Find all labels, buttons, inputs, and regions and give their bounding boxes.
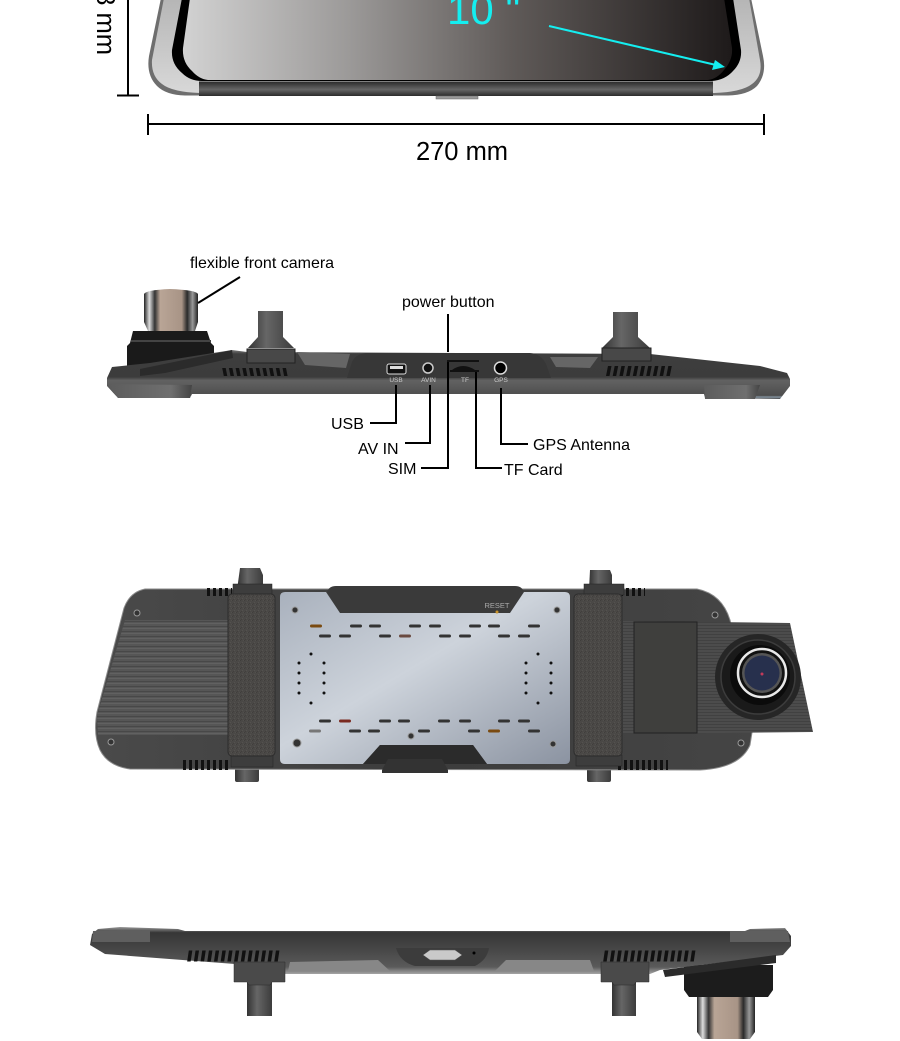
left grip texture [92, 930, 150, 942]
clip: right strap [602, 312, 650, 348]
vents right [607, 366, 673, 376]
panel: top side view with ports [107, 255, 790, 479]
rear camera assembly [684, 965, 773, 1039]
brushed left panel [97, 620, 230, 735]
height dimension line [117, 0, 139, 96]
clip: left base [247, 349, 295, 363]
callout: power button: power button [402, 294, 495, 311]
front camera assembly [127, 289, 214, 366]
diamond button [423, 950, 462, 960]
screws [108, 607, 744, 747]
port: SIM and TF slots: TF [461, 377, 469, 384]
clip: right base [602, 348, 651, 361]
right grip texture [730, 931, 790, 942]
callout: TF Card: TF Card [504, 462, 563, 479]
right foam pad [574, 594, 622, 756]
panel: rear view [96, 568, 813, 782]
black screen border [172, 0, 741, 81]
callout: power button [402, 294, 495, 352]
clip: left strap [248, 311, 294, 348]
port: AV IN: AVIN [421, 377, 436, 384]
camera arm [663, 955, 776, 977]
vents [188, 950, 697, 962]
rear hump [327, 586, 524, 613]
width dimension label: 270 mm [416, 138, 508, 166]
port: GPS: GPS [494, 377, 509, 384]
callout: GPS Antenna: GPS Antenna [533, 437, 630, 454]
right highlight strip [550, 357, 598, 368]
callout: flexible front camera [190, 255, 334, 303]
mirror body side [90, 927, 791, 974]
callout: USB [331, 385, 396, 433]
right grip texture [704, 385, 760, 399]
microphone hole [472, 952, 476, 954]
port: USB: USB [389, 377, 403, 384]
vents [183, 592, 668, 765]
left grip texture [107, 384, 192, 398]
mirror body side [107, 350, 790, 399]
lower dark bar [199, 82, 713, 96]
centre button panel [396, 948, 489, 966]
screen with gradient [183, 0, 732, 80]
clip bases [231, 584, 624, 767]
rear camera plate [623, 621, 813, 734]
callout: AV IN [358, 385, 430, 458]
diagonal arrow [549, 26, 725, 70]
centre port panel [347, 353, 551, 378]
port: GPS [494, 362, 509, 384]
silver bezel corners [152, 0, 761, 93]
callout: flexible front camera: flexible front camera [190, 255, 334, 272]
vents left [223, 368, 290, 376]
callout: SIM: SIM [388, 461, 416, 478]
callout: USB: USB [331, 416, 364, 433]
port: USB [387, 364, 406, 384]
panel: front view of mirror with dimensions [91, 0, 764, 166]
lower dark notch [363, 745, 487, 764]
callout: TF Card [476, 372, 563, 479]
clip: right base [601, 962, 649, 985]
clip: right strap [612, 980, 636, 1016]
reset label: RESET [484, 601, 510, 610]
port: AV IN [421, 363, 436, 384]
bottom tab [382, 759, 448, 773]
bottom connector tab [436, 96, 478, 99]
callout: SIM [388, 362, 448, 478]
port: SIM and TF slots [447, 360, 479, 384]
left foam pad [228, 594, 275, 756]
rear body shell [96, 589, 754, 770]
clip: left strap [247, 980, 272, 1016]
clip straps [235, 568, 612, 782]
mirror housing outline [148, 0, 764, 96]
left highlight strip [288, 960, 390, 971]
camera arm [140, 350, 233, 376]
callout: GPS Antenna [501, 388, 630, 454]
right highlight strip [495, 960, 594, 971]
callout: AV IN: AV IN [358, 441, 399, 458]
left highlight strip [297, 352, 350, 368]
plate holes [298, 652, 552, 704]
plate slots [309, 624, 540, 732]
metal mounting plate [280, 592, 570, 764]
dark label rectangle [634, 622, 697, 733]
rear camera lens [715, 634, 801, 720]
width dimension line [148, 114, 764, 135]
clip: left base [234, 962, 285, 985]
panel: bottom side view [90, 927, 791, 1039]
